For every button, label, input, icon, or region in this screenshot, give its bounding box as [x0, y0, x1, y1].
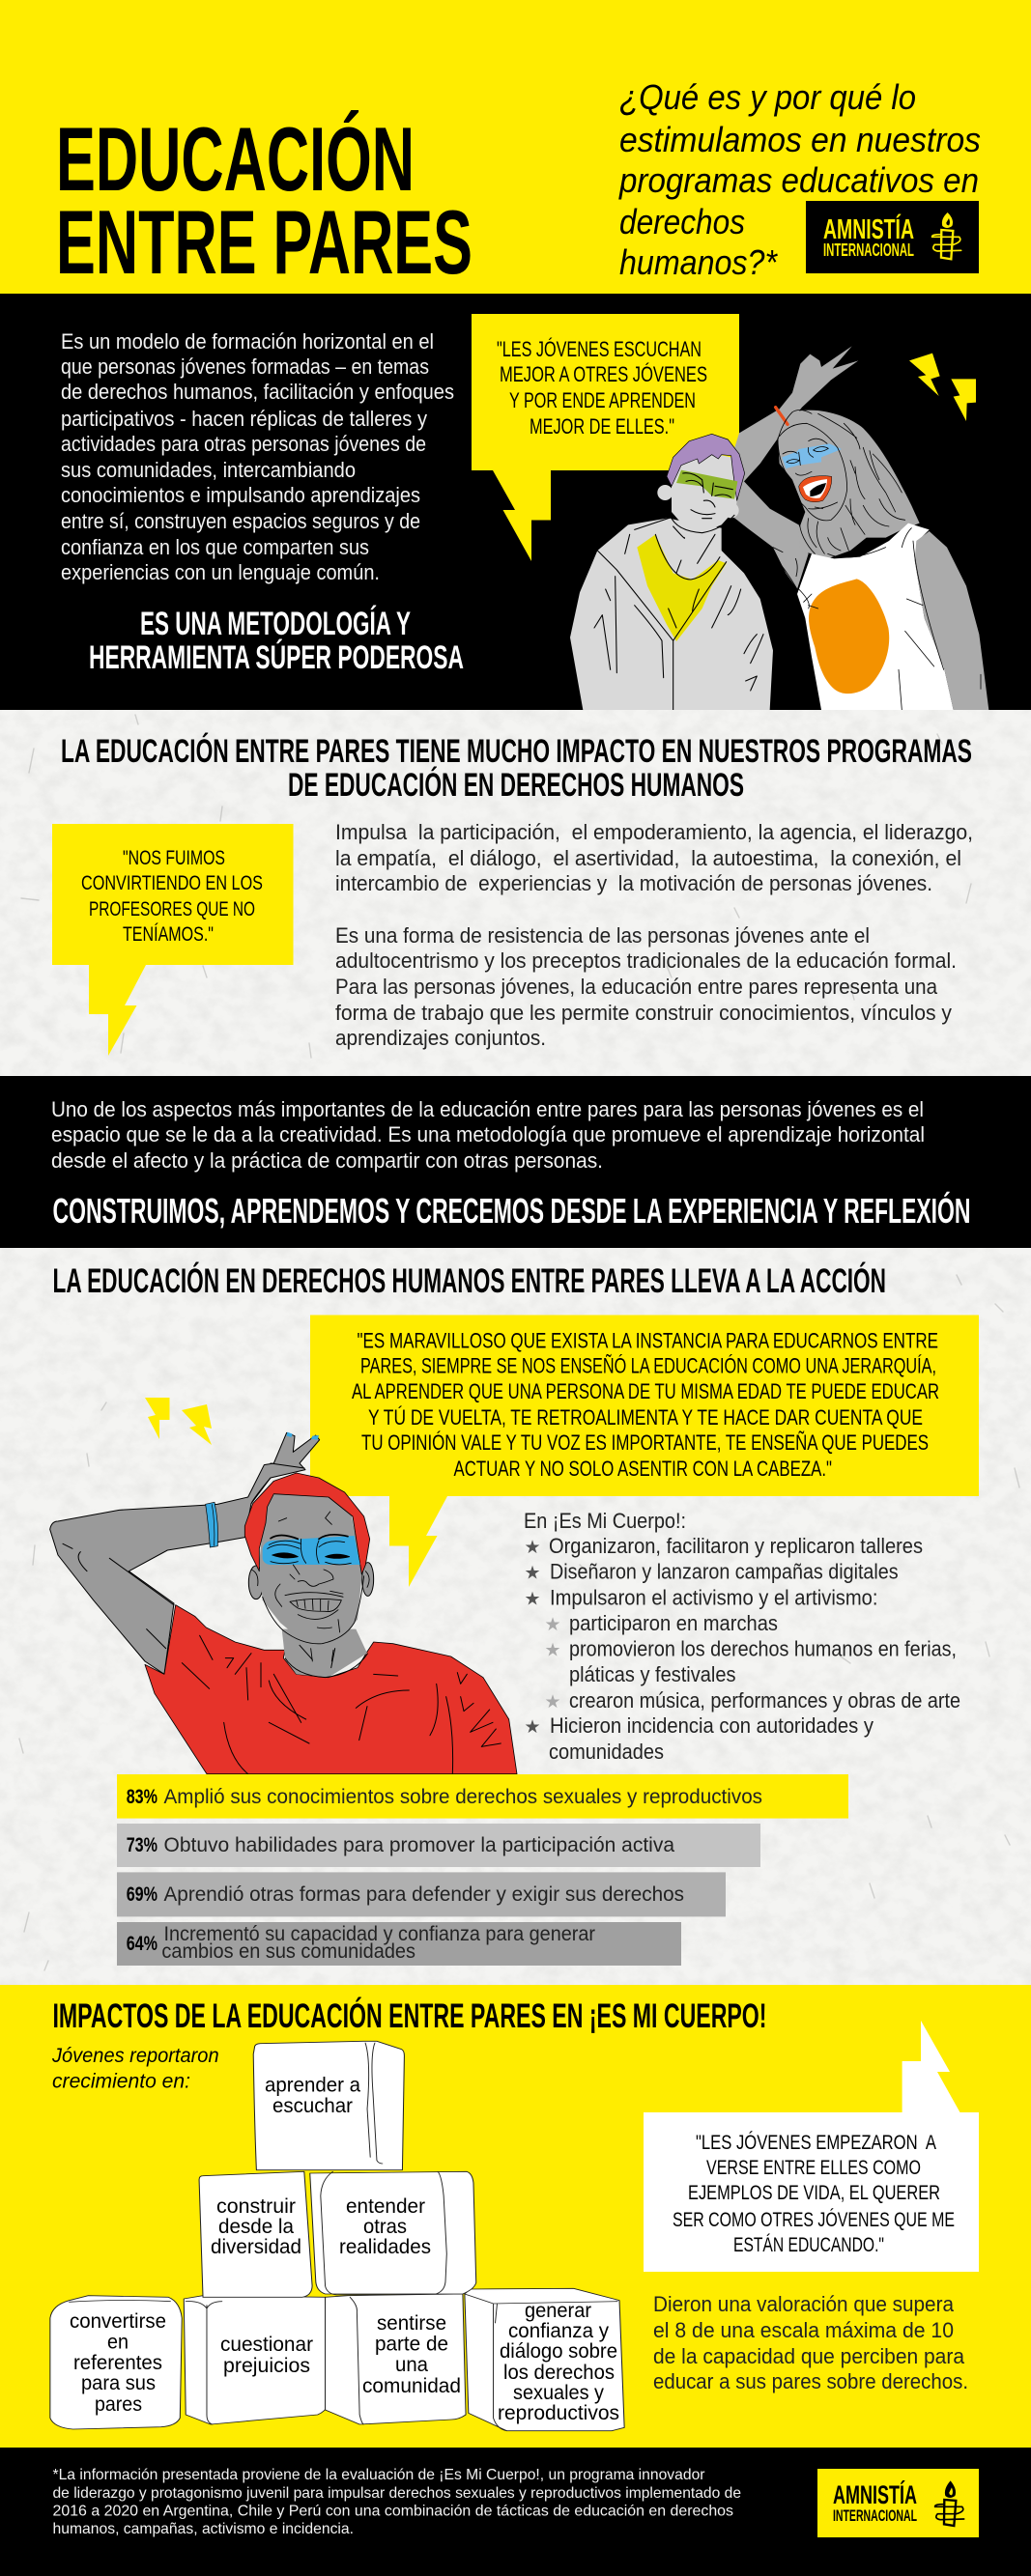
speech bubble: es maravilloso: ACTUAR Y NO SOLO ASENTIR CON LA CABEZA.": [454, 1457, 832, 1481]
panel: intro black section: [0, 294, 1031, 710]
block: sentirse parte de una comunidad: [362, 2312, 461, 2397]
intro paragraph: Es un modelo de formación horizontal en el: [61, 329, 434, 354]
speech bubble: les jóvenes escuchan: MEJOR DE ELLES.": [530, 414, 674, 439]
list: En ¡Es Mi Cuerpo!: ★: [524, 1537, 541, 1558]
subtitle question: ¿Qué es y por qué lo: [619, 77, 916, 117]
text block: impulsa la participación: Impulsa la participación, el empoderamiento, la agencia, el liderazgo,: [335, 820, 973, 844]
block: sentirse parte de una comunidad: comunidad: [362, 2375, 461, 2397]
text block: impulsa la participación: intercambio de experiencias y la motivación de personas jóvenes.: [335, 871, 932, 895]
text block: forma de resistencia: [335, 923, 957, 1050]
block: entender otras realidades: realidades: [339, 2236, 431, 2258]
intro paragraph: sus comunidades, intercambiando: [61, 458, 356, 482]
bar 83%: 83%: [127, 1786, 158, 1808]
block: generar confianza y diálogo: [498, 2300, 619, 2424]
list: En ¡Es Mi Cuerpo!: ★: [544, 1691, 561, 1713]
logo: Amnistía Internacional: [806, 201, 979, 273]
footnote text: 2016 a 2020 en Argentina, Chile y Perú con una combinación de tácticas de educación en derechos: [52, 2503, 733, 2519]
intro paragraph: [61, 329, 454, 584]
icon: candle: [932, 212, 961, 259]
intro italics: Jóvenes reportaron: [51, 2045, 219, 2067]
panel: impact on programmes: [0, 710, 1031, 1076]
list: En ¡Es Mi Cuerpo!: Organizaron, facilitaron y replicaron talleres: [549, 1534, 923, 1558]
text block: creativity: [51, 1097, 925, 1173]
text block: forma de resistencia: adultocentrismo y los preceptos tradicionales de la educación formal.: [335, 948, 957, 973]
panel: action: [0, 1248, 1031, 1985]
speech bubble: nos fuimos convirtiendo: TENÍAMOS.": [123, 923, 214, 946]
subtitle question: [618, 77, 981, 282]
list: En ¡Es Mi Cuerpo!: ★: [524, 1716, 541, 1738]
speech bubble: nos fuimos convirtiendo: PROFESORES QUE NO: [89, 898, 255, 920]
face features: [251, 1512, 369, 1661]
footnote text: *La información presentada proviene de la evaluación de ¡Es Mi Cuerpo!, un programa innovador: [52, 2467, 705, 2483]
block: construir desde la diversidad: desde la: [218, 2216, 294, 2238]
block: convertirse en referentes: pares: [95, 2393, 142, 2416]
block: sentirse parte de una comunidad: una: [395, 2354, 428, 2376]
speech bubble: les jóvenes empezaron: "LES JÓVENES EMPEZARON A: [696, 2132, 936, 2154]
block: cuestionar prejuicios: cuestionar: [220, 2334, 313, 2356]
text block: valoración: Dieron una valoración que supera: [653, 2292, 955, 2316]
footnote text: de liderazgo y protagonismo juvenil para impulsar derechos sexuales y reproductivos implementado de: [52, 2485, 741, 2502]
bar 64%: cambios en sus comunidades: [161, 1940, 415, 1963]
block: cuestionar prejuicios: [220, 2334, 313, 2377]
woman: [722, 346, 988, 710]
speech bubble: les jóvenes empezaron: [644, 2021, 979, 2272]
list: En ¡Es Mi Cuerpo!: ★: [524, 1589, 541, 1610]
bar 64%: Incrementó su capacidad y confianza para generar: [164, 1923, 595, 1945]
bar 69%: Aprendió otras formas para defender y exigir sus derechos: [164, 1883, 684, 1906]
illustration: person with raised arm: [50, 1432, 517, 1774]
block: generar confianza y diálogo: sexuales y: [513, 2382, 604, 2404]
text block: forma de resistencia: forma de trabajo que les permite construir conocimientos, vínculos y: [335, 1001, 952, 1025]
panel: footer: [0, 2448, 1031, 2576]
intro paragraph: conocimientos e impulsando aprendizajes: [61, 483, 420, 507]
speech bubble: les jóvenes empezaron: ESTÁN EDUCANDO.": [733, 2234, 884, 2256]
intro paragraph: confianza en los que comparten sus: [61, 535, 369, 559]
subtitle question: programas educativos en: [618, 160, 979, 200]
list: En ¡Es Mi Cuerpo!: ★: [544, 1640, 561, 1661]
logo: Amnistía Internacional yellow: INTERNACIONAL: [833, 2506, 917, 2525]
subtitle question: estimulamos en nuestros: [619, 120, 981, 159]
text block: creativity: espacio que se le da a la creatividad. Es una metodología que promueve el aprendizaje horizontal: [51, 1122, 925, 1146]
bar 69%: [117, 1872, 726, 1916]
text block: creativity: Uno de los aspectos más importantes de la educación entre pares para las personas jóvenes es el: [51, 1097, 924, 1121]
text block: forma de resistencia: aprendizajes conjuntos.: [335, 1026, 546, 1050]
woman's face, hair strands: [778, 410, 920, 553]
illustration: two young people: [570, 346, 988, 710]
intro paragraph: de derechos humanos, facilitación y enfoques: [61, 380, 454, 404]
text block: creativity: desde el afecto y la práctica de compartir con otras personas.: [51, 1148, 603, 1173]
panel: creativity black band: [0, 1076, 1031, 1248]
block: sentirse parte de una comunidad: parte de: [375, 2334, 448, 2356]
highlighted statement: [89, 606, 464, 676]
logo: Amnistía Internacional: INTERNACIONAL: [823, 241, 914, 260]
list: En ¡Es Mi Cuerpo!: participaron en marchas: [569, 1611, 778, 1635]
list: En ¡Es Mi Cuerpo!: Impulsaron el activismo y el artivismo:: [550, 1586, 877, 1610]
intro paragraph: que personas jóvenes formadas – en temas: [61, 354, 429, 379]
blocks pyramid: [50, 2041, 624, 2431]
block: sentirse parte de una comunidad: sentirse: [377, 2312, 446, 2335]
text block: valoración: de la capacidad que perciben para: [653, 2344, 965, 2368]
highlighted statement: HERRAMIENTA SÚPER PODEROSA: [89, 639, 464, 676]
panel: impacts yellow section: [0, 1985, 1031, 2448]
footnote text: humanos, campañas, activismo e incidencia.: [52, 2521, 354, 2537]
logo: Amnistía Internacional: AMNISTÍA: [823, 212, 914, 245]
block: aprender a escuchar: [265, 2075, 360, 2117]
bar 73%: [117, 1824, 760, 1867]
logo: Amnistía Internacional yellow: AMNISTÍA: [833, 2479, 917, 2509]
speech bubble: nos fuimos convirtiendo: CONVIRTIENDO EN LOS: [81, 872, 263, 894]
bar chart: learning results: [117, 1774, 848, 1966]
intro paragraph: participativos - hacen réplicas de talleres y: [61, 407, 427, 431]
boy: [570, 434, 773, 710]
logo: Amnistía Internacional yellow: [817, 2469, 979, 2537]
list: En ¡Es Mi Cuerpo!: Hicieron incidencia con autoridades y: [550, 1713, 873, 1738]
footnote text: [52, 2467, 741, 2537]
text block: valoración: el 8 de una escala máxima de 10: [653, 2318, 954, 2342]
bar 83%: Amplió sus conocimientos sobre derechos sexuales y reproductivos: [164, 1786, 762, 1808]
bar 73%: Obtuvo habilidades para promover la participación activa: [164, 1834, 674, 1856]
speech bubble: les jóvenes escuchan: MEJOR A OTRES JÓVENES: [500, 362, 707, 386]
text block: valoración: [653, 2292, 968, 2393]
icon: lightning bolts: [145, 1398, 212, 1445]
block: entender otras realidades: otras: [363, 2216, 407, 2238]
speech bubble: les jóvenes escuchan: [472, 314, 739, 561]
highlighted statement: ES UNA METODOLOGÍA Y: [140, 606, 411, 642]
heading: [61, 733, 972, 804]
title: EDUCACIÓN: [56, 108, 415, 210]
block: convertirse en referentes: para sus: [81, 2372, 156, 2394]
list: En ¡Es Mi Cuerpo!: promovieron los derechos humanos en ferias,: [569, 1636, 957, 1661]
block: aprender a escuchar: escuchar: [272, 2095, 353, 2117]
list: En ¡Es Mi Cuerpo!: comunidades: [549, 1740, 664, 1764]
bar 64%: 64%: [127, 1933, 158, 1955]
text block: valoración: educar a sus pares sobre derechos.: [653, 2369, 968, 2393]
panel: header: [0, 0, 1031, 294]
intro paragraph: entre sí, construyen espacios seguros y de: [61, 509, 420, 533]
list: En ¡Es Mi Cuerpo!: [524, 1509, 960, 1764]
block: construir desde la diversidad: [211, 2195, 301, 2258]
text block: impulsa la participación: [335, 820, 973, 895]
title: ENTRE PARES: [56, 191, 473, 293]
block: generar confianza y diálogo: diálogo sobre: [500, 2340, 617, 2363]
list: En ¡Es Mi Cuerpo!: ★: [524, 1563, 541, 1584]
title: [56, 108, 473, 293]
icon: lightning bolts: [909, 354, 976, 421]
icon: candle: [935, 2480, 964, 2526]
block: cuestionar prejuicios: prejuicios: [223, 2355, 310, 2377]
block: convertirse en referentes: en: [107, 2332, 129, 2354]
block: convertirse en referentes: convertirse: [70, 2310, 166, 2333]
list: En ¡Es Mi Cuerpo!: ★: [544, 1614, 561, 1635]
block: generar confianza y diálogo: confianza y: [508, 2320, 609, 2342]
heading: DE EDUCACIÓN EN DERECHOS HUMANOS: [288, 767, 744, 804]
list: En ¡Es Mi Cuerpo!: crearon música, performances y obras de arte: [569, 1688, 960, 1713]
block: entender otras realidades: [339, 2195, 431, 2258]
block shapes: [50, 2041, 624, 2431]
block: generar confianza y diálogo: reproductivos: [498, 2402, 619, 2424]
bar 64%: [117, 1922, 681, 1966]
text block: forma de resistencia: Para las personas jóvenes, la educación entre pares representa una: [335, 975, 938, 999]
block: aprender a escuchar: aprender a: [265, 2075, 360, 2097]
block: generar confianza y diálogo: generar: [525, 2300, 591, 2322]
list: En ¡Es Mi Cuerpo!: pláticas y festivales: [569, 1662, 736, 1686]
speech bubble: les jóvenes empezaron: VERSE ENTRE ELLES COMO: [706, 2157, 921, 2179]
bar 69%: 69%: [127, 1883, 158, 1906]
intro paragraph: experiencias con un lenguaje común.: [61, 560, 380, 584]
list: En ¡Es Mi Cuerpo!: Diseñaron y lanzaron campañas digitales: [550, 1559, 899, 1584]
bar 83%: [117, 1774, 848, 1819]
intro italics: [51, 2045, 219, 2093]
subtitle question: derechos: [619, 202, 745, 241]
speech bubble: les jóvenes escuchan: Y POR ENDE APRENDEN: [509, 388, 696, 412]
block: entender otras realidades: entender: [346, 2195, 425, 2218]
intro paragraph: actividades para otras personas jóvenes de: [61, 432, 426, 456]
subtitle question: humanos?*: [619, 242, 778, 282]
speech bubble: nos fuimos convirtiendo: "NOS FUIMOS: [123, 847, 225, 869]
block: convertirse en referentes: [70, 2310, 166, 2416]
speech bubble: es maravilloso: [310, 1316, 979, 1587]
bar 73%: 73%: [127, 1834, 158, 1856]
speech bubble: les jóvenes escuchan: "LES JÓVENES ESCUCHAN: [497, 337, 702, 361]
intro italics: crecimiento en:: [52, 2071, 190, 2093]
block: construir desde la diversidad: diversidad: [211, 2236, 301, 2258]
speech bubble: les jóvenes empezaron: EJEMPLOS DE VIDA, EL QUERER: [688, 2182, 940, 2204]
block: convertirse en referentes: referentes: [73, 2352, 162, 2374]
text block: forma de resistencia: Es una forma de resistencia de las personas jóvenes ante el: [335, 923, 870, 948]
speech bubble: nos fuimos convirtiendo: [52, 824, 294, 1056]
text block: impulsa la participación: la empatía, el diálogo, el asertividad, la autoestima, la conexión, el: [335, 846, 961, 870]
block: construir desde la diversidad: construir: [216, 2195, 296, 2218]
block: generar confianza y diálogo: los derechos: [503, 2362, 615, 2384]
list: En ¡Es Mi Cuerpo!: En ¡Es Mi Cuerpo!:: [524, 1509, 686, 1533]
